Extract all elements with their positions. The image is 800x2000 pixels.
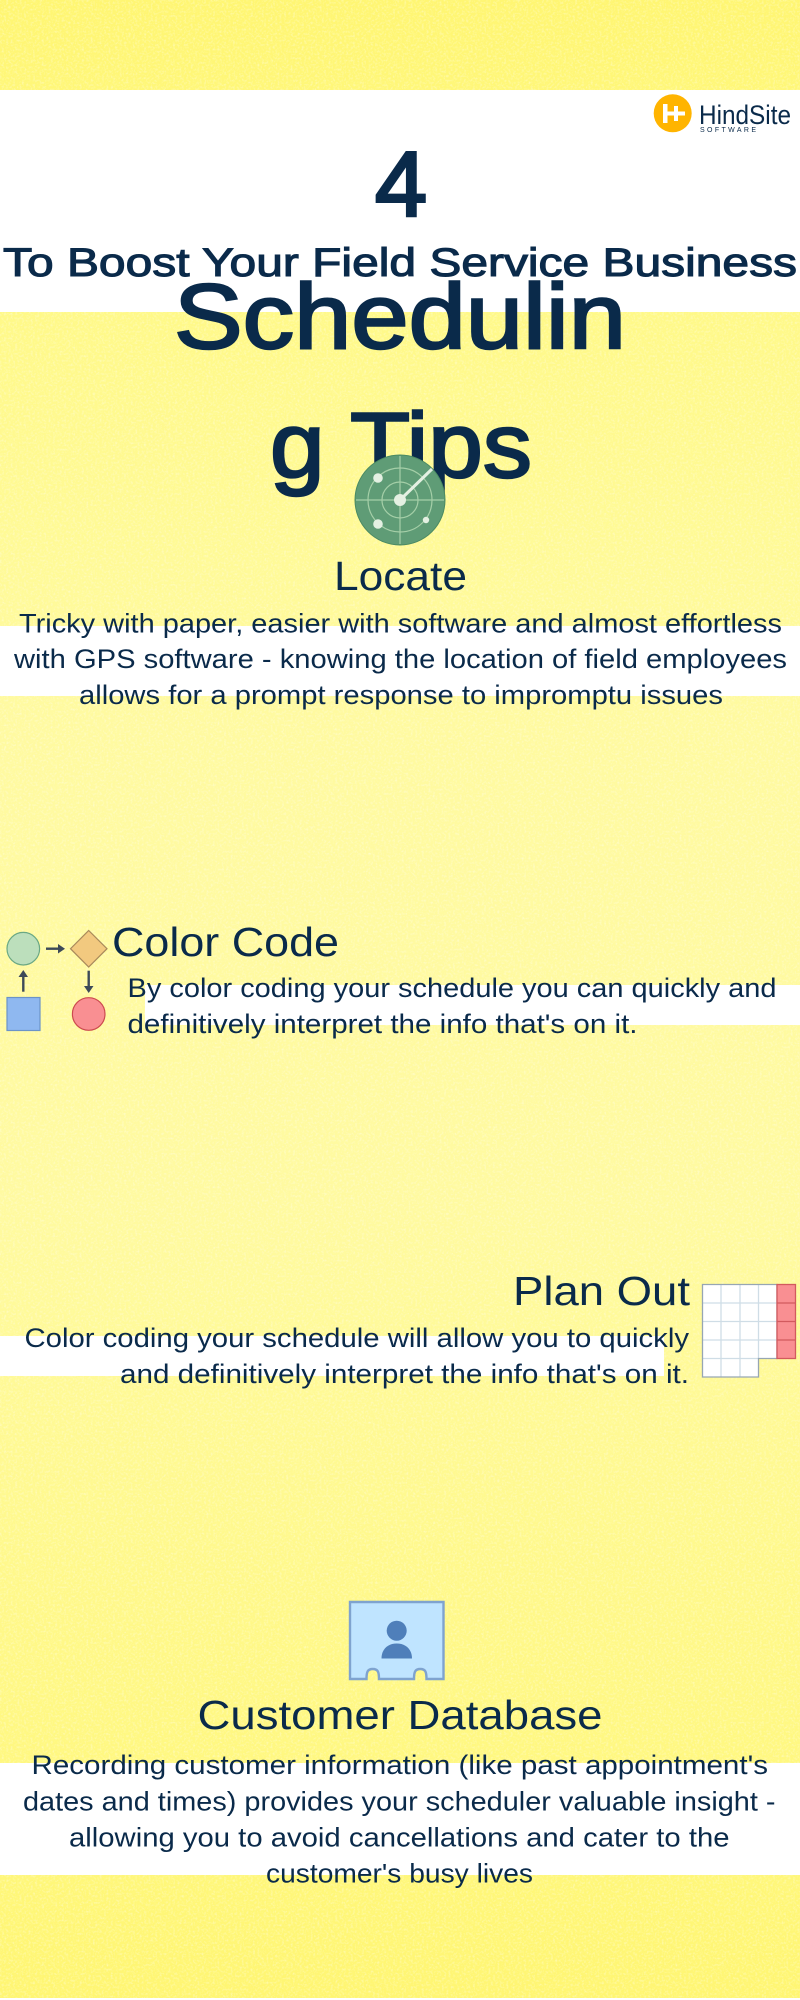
logo: HindSite Software (654, 94, 791, 134)
title: To Boost Your Field Service Business (3, 241, 797, 285)
section: Locate: Locate (334, 553, 467, 599)
section: Plan Out: and definitively interpret the info that's on it. (120, 1359, 689, 1389)
section: Customer Database: dates and times) provides your scheduler valuable insight - (23, 1786, 776, 1816)
title (3, 134, 797, 497)
section: Plan Out: Plan Out (513, 1268, 691, 1314)
section: Color Code: By color coding your schedule you can quickly and (128, 973, 776, 1003)
section: Locate: allows for a prompt response to impromptu issues (79, 680, 723, 710)
section: Customer Database: Customer Database (198, 1692, 602, 1738)
section: Locate: Tricky with paper, easier with software and almost effortless (19, 608, 782, 638)
icon: radar (355, 455, 445, 545)
icon: calendar grid (702, 1284, 796, 1377)
icon: customer contact card (350, 1602, 444, 1679)
section: Customer Database (23, 1692, 776, 1888)
section: Locate: with GPS software - knowing the location of field employees (13, 644, 787, 674)
section: Plan Out: Color coding your schedule will allow you to quickly (24, 1323, 690, 1353)
title: Schedulin (174, 266, 626, 368)
section: Customer Database: Recording customer information (like past appointment's (32, 1750, 768, 1780)
title: 4 (375, 134, 427, 236)
logo: HindSite Software: HindSite (699, 100, 791, 130)
icon: color-coded flowchart (7, 930, 107, 1030)
section: Color Code (112, 919, 776, 1039)
section: Customer Database: customer's busy lives (266, 1858, 533, 1888)
title: g Tips (270, 395, 532, 497)
section: Customer Database: allowing you to avoid cancellations and cater to the (69, 1822, 730, 1852)
section: Plan Out (24, 1268, 691, 1389)
logo: HindSite Software: SOFTWARE (700, 127, 756, 134)
section: Color Code: definitively interpret the info that's on it. (128, 1009, 638, 1039)
section: Locate (13, 553, 787, 710)
section: Color Code: Color Code (112, 919, 339, 965)
